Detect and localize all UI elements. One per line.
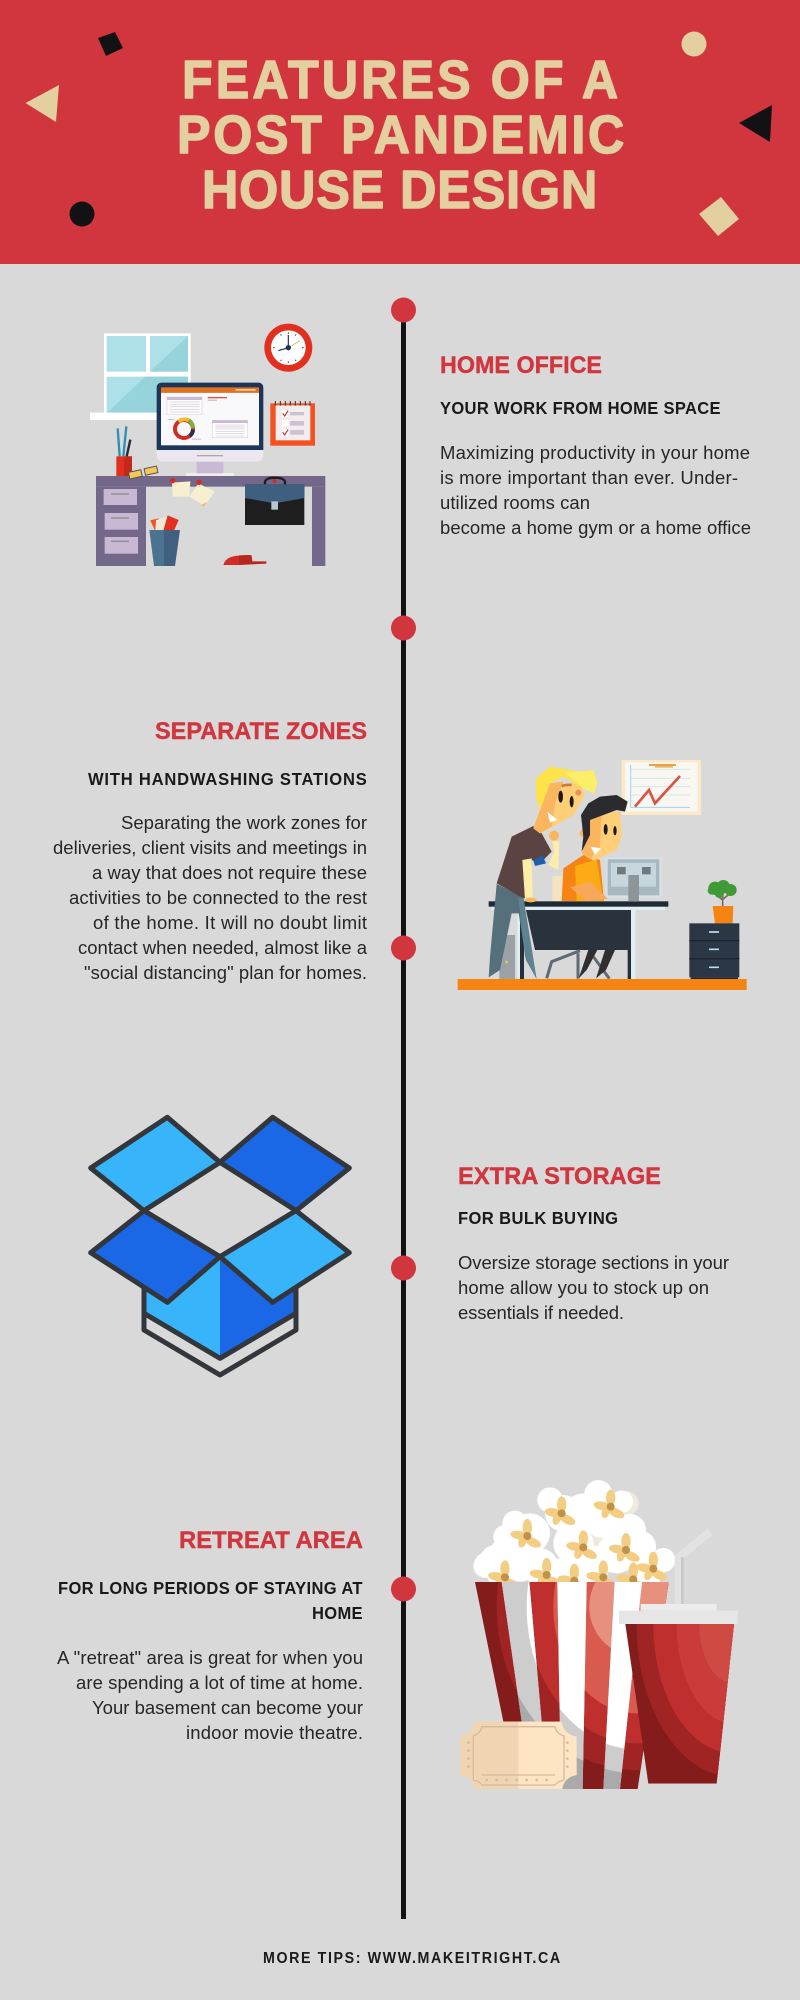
section text: extra storage: essentials if needed. xyxy=(458,1302,624,1323)
potted plant xyxy=(708,880,737,923)
footer: MORE TIPS: WWW.MAKEITRIGHT.CA xyxy=(263,1951,560,1967)
sticky notes xyxy=(170,478,215,506)
section text: home office: HOME OFFICE xyxy=(440,352,602,379)
section text: extra storage: Oversize storage sections in your xyxy=(458,1252,729,1273)
section text: separate zones: "social distancing" plan for homes. xyxy=(84,962,367,983)
section text: separate zones: Separating the work zones for xyxy=(121,812,367,833)
section text: retreat area xyxy=(57,1527,363,1743)
desk xyxy=(96,476,325,566)
section text: separate zones: contact when needed, almost like a xyxy=(78,937,368,958)
section text: extra storage: EXTRA STORAGE xyxy=(458,1163,661,1190)
shape: black circle xyxy=(70,202,94,226)
header banner xyxy=(0,0,800,264)
waste bin xyxy=(149,515,180,566)
clock xyxy=(264,324,312,372)
title: HOUSE DESIGN xyxy=(202,160,597,220)
section text: retreat area: are spending a lot of time at home. xyxy=(76,1672,363,1693)
shape: tan diamond xyxy=(699,197,739,236)
section text: retreat area: RETREAT AREA xyxy=(179,1527,363,1554)
section text: separate zones: activities to be connected to the rest xyxy=(69,887,367,908)
computer monitor xyxy=(606,857,662,901)
section text: home office xyxy=(440,352,751,538)
section text: separate zones: deliveries, client visits and meetings in xyxy=(53,837,367,858)
popcorn xyxy=(472,1480,675,1582)
section text: home office: YOUR WORK FROM HOME SPACE xyxy=(440,397,721,418)
section text: separate zones: a way that does not require these xyxy=(92,862,367,883)
seated man xyxy=(547,795,628,979)
illustration: popcorn, drink and ticket xyxy=(460,1480,738,1789)
section text: retreat area: FOR LONG PERIODS OF STAYING AT xyxy=(58,1577,363,1598)
section text: home office: is more important than ever. Under- xyxy=(440,467,738,488)
illustration: home office desk xyxy=(90,324,325,566)
section text: home office: Maximizing productivity in your home xyxy=(440,442,750,463)
section text: extra storage xyxy=(458,1163,729,1323)
flaps xyxy=(91,1117,349,1302)
glasses xyxy=(128,466,158,479)
popcorn bucket xyxy=(475,1582,669,1789)
shape: black triangle xyxy=(739,105,772,142)
section text: retreat area: HOME xyxy=(312,1602,363,1623)
title xyxy=(177,50,624,220)
timeline xyxy=(391,298,416,1919)
section text: separate zones xyxy=(53,718,368,983)
calendar xyxy=(270,401,315,446)
shape: black diamond xyxy=(98,32,123,56)
shape: tan circle xyxy=(682,32,706,56)
box base xyxy=(144,1259,296,1375)
section text: home office: become a home gym or a home office xyxy=(440,517,751,538)
section text: separate zones: SEPARATE ZONES xyxy=(155,718,367,745)
computer tower xyxy=(499,935,515,979)
standing man xyxy=(489,767,597,979)
illustration: open storage box xyxy=(91,1117,349,1375)
title: FEATURES OF A xyxy=(182,50,618,110)
window xyxy=(90,333,191,420)
filing cabinet xyxy=(689,923,739,979)
slippers xyxy=(223,555,266,565)
illustration: two people at a computer xyxy=(458,760,747,990)
section text: retreat area: A "retreat" area is great for when you xyxy=(57,1647,363,1668)
orange floor xyxy=(458,979,747,990)
section text: home office: utilized rooms can xyxy=(440,492,590,513)
section text: retreat area: indoor movie theatre. xyxy=(186,1722,363,1743)
section text: extra storage: FOR BULK BUYING xyxy=(458,1207,618,1228)
section text: retreat area: Your basement can become your xyxy=(92,1697,363,1718)
section text: separate zones: WITH HANDWASHING STATIONS xyxy=(88,768,367,789)
chart poster xyxy=(622,760,701,815)
briefcase xyxy=(245,478,304,525)
pen cup xyxy=(116,426,132,477)
shape: tan triangle xyxy=(26,85,59,122)
title: POST PANDEMIC xyxy=(177,105,624,165)
monitor xyxy=(157,383,263,476)
ticket xyxy=(460,1722,577,1789)
desk xyxy=(489,901,668,979)
section text: extra storage: home allow you to stock up on xyxy=(458,1277,709,1298)
drink cup xyxy=(619,1529,738,1784)
section text: separate zones: of the home. It will no doubt limit xyxy=(93,912,367,933)
